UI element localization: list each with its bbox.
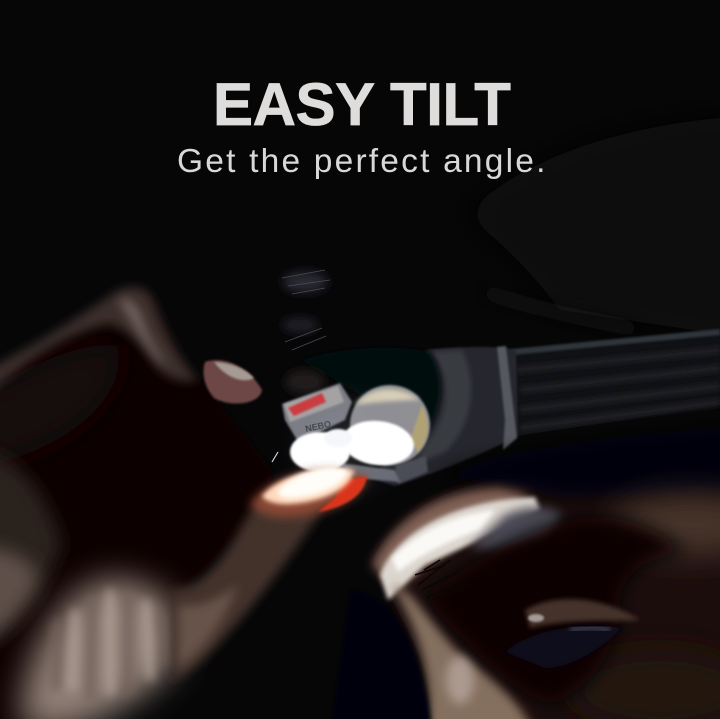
eye xyxy=(505,599,640,668)
face xyxy=(330,425,720,719)
nose bridge xyxy=(392,585,535,719)
hair xyxy=(282,270,640,350)
lamp glow xyxy=(272,380,416,510)
lamp head: NEBO xyxy=(304,419,332,434)
forehead light band xyxy=(380,497,540,600)
hat xyxy=(465,115,720,340)
eyebrow and eye socket xyxy=(415,517,685,705)
fingertip lit by lamp xyxy=(250,467,367,517)
lamp head xyxy=(282,383,430,482)
left lit palm edge xyxy=(0,450,62,660)
title: EASY TILT xyxy=(213,71,511,138)
strap xyxy=(510,330,720,436)
pinching fingertip xyxy=(204,360,262,404)
warm halo on forehead xyxy=(372,488,530,590)
dark hair left of nose xyxy=(330,590,432,719)
thumb xyxy=(172,490,322,680)
hand xyxy=(0,287,322,719)
wrinkled lit folds xyxy=(22,578,176,719)
headlamp body xyxy=(285,346,518,486)
right cheek xyxy=(570,650,720,719)
subtitle: Get the perfect angle. xyxy=(177,143,548,180)
top finger lit ridge xyxy=(0,287,198,392)
palm xyxy=(0,290,272,719)
right forehead skin xyxy=(610,495,720,555)
dark headband shadow xyxy=(430,425,720,498)
